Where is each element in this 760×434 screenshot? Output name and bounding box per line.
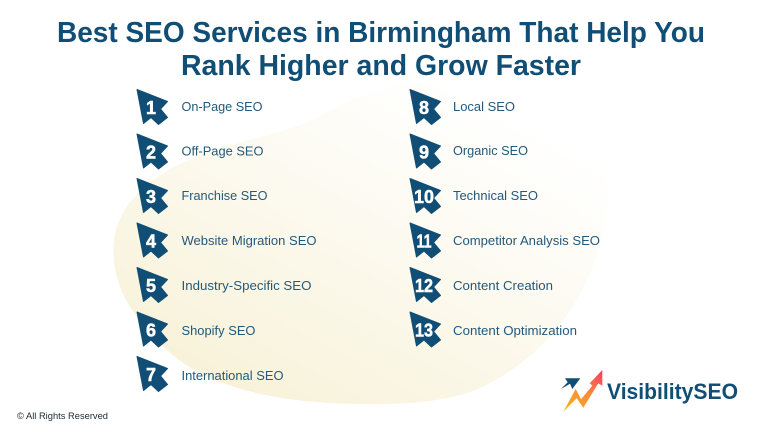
list item 13: Content Optimization [453, 323, 577, 338]
list item 10 [410, 178, 538, 214]
list item 11: Competitor Analysis SEO [453, 233, 600, 248]
list item 6: 6 [146, 320, 156, 340]
title: Rank Higher and Grow Faster [181, 50, 581, 82]
list item 2: Off-Page SEO [182, 144, 264, 158]
list item 2 [137, 134, 264, 169]
list item 6: Shopify SEO [182, 323, 256, 338]
title: Best SEO Services in Birmingham That Help You [57, 17, 705, 49]
list item 5: Industry-Specific SEO [182, 278, 312, 293]
list item 11 [410, 223, 600, 258]
list item 7: 7 [146, 365, 156, 385]
copyright: © All Rights Reserved [17, 411, 108, 422]
background blob [113, 82, 608, 404]
list item 10: Technical SEO [453, 188, 538, 203]
list item 5: 5 [146, 276, 156, 296]
list item 12: 12 [415, 276, 433, 296]
list item 5 [137, 268, 312, 302]
list item 8: 8 [419, 98, 429, 118]
list item 9: 9 [419, 142, 429, 162]
list item 3: Franchise SEO [182, 188, 268, 203]
list item 3 [137, 178, 268, 214]
list item 11: 11 [416, 232, 432, 252]
list item 8: Local SEO [453, 99, 515, 114]
list item 1: 1 [146, 98, 156, 118]
logo: VisibilitySEO [561, 370, 738, 412]
icon: rising orange arrow [563, 370, 602, 412]
logo wordmark: VisibilitySEO [607, 379, 738, 404]
list item 7 [137, 356, 284, 392]
list item 13: 13 [415, 320, 433, 340]
list item 1: On-Page SEO [182, 99, 262, 114]
list item 9: Organic SEO [453, 143, 528, 158]
list item 12 [410, 268, 553, 302]
list item 9 [410, 134, 528, 169]
list item 4: Website Migration SEO [182, 233, 316, 248]
title [57, 17, 705, 82]
icon: navy arrow [561, 378, 580, 389]
list item 13 [410, 312, 577, 347]
list item 6 [137, 312, 256, 347]
list item 3: 3 [146, 187, 156, 207]
list item 12: Content Creation [453, 278, 553, 293]
list item 7: International SEO [182, 368, 284, 383]
list item 8 [410, 90, 515, 124]
list item 2: 2 [146, 142, 156, 162]
list item 1 [137, 90, 262, 124]
list item 4 [137, 223, 316, 258]
list item 10: 10 [414, 187, 434, 207]
list item 4: 4 [146, 232, 156, 252]
